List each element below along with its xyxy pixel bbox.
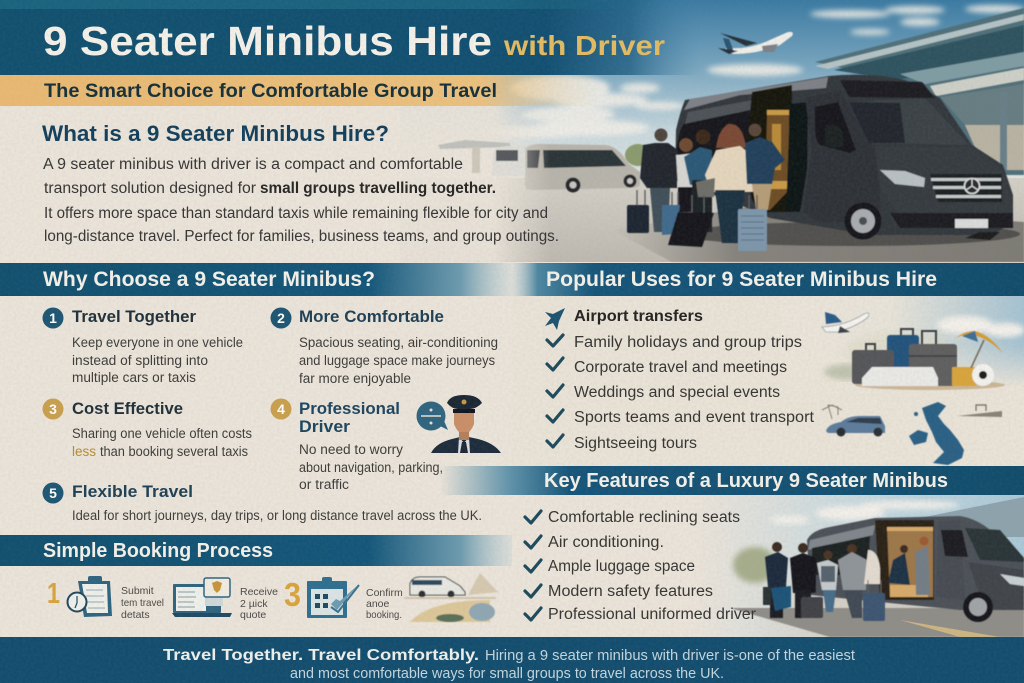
reason 4: professional driver [270,398,443,492]
hero photo: airport scene [400,0,1024,262]
reason 2: more comfortable: and luggage space make journeys [299,353,495,368]
simple booking header band [0,535,512,566]
title accent: with Driver: with Driver [503,30,665,61]
heading: Why Choose a 9 Seater Minibus? [43,268,375,291]
intro bold phrase: small groups travelling together. [260,180,496,197]
group of passengers with luggage [627,124,785,251]
intro line 4: long-distance travel. Perfect for families, business teams, and group outings. [44,228,559,245]
illustration: grey minibus with passengers boarding [763,516,1024,622]
airport terminal [815,8,1024,175]
intro line 2: transport solution designed for [44,180,256,197]
illustration: landmark on hill [957,405,1002,417]
right panel paper sky: popular uses [512,296,1024,466]
booking step 2: receive quote: 2 µick [240,598,268,610]
reason 2: more comfortable: far more enjoyable [299,371,411,386]
use: family holidays: Family holidays and group trips [574,334,802,351]
canopy and distant bus [438,140,524,176]
reason 5: flexible travel: Flexible Travel [72,482,193,501]
airplane [718,32,793,54]
footer bold line: Travel Together. Travel Comfortably. [163,647,479,664]
check [525,511,541,523]
feature: safety: Modern safety features [548,583,713,600]
icon: plane bullet [545,308,565,330]
background silver minibus [525,144,651,192]
booking step 2: receive quote: quote [240,609,266,621]
reason 2: more comfortable: More Comfortable [299,307,444,326]
reason 3: cost effective: than booking several taxis [100,444,248,459]
check [547,410,563,422]
check [547,385,563,397]
check [547,335,563,346]
intro line 3: It offers more space than standard taxis while remaining flexible for city and [44,205,548,222]
heading: Simple Booking Process [43,540,273,562]
reason 3: cost effective: 3 [49,401,57,417]
booking step 1: submit details: 1 [47,578,60,610]
booking step 3: confirm booking: booking. [366,609,402,621]
reason 1: travel together: instead of splitting into [72,353,208,368]
check [525,560,541,572]
reason 5: flexible travel [42,482,482,523]
reason 2: more comfortable: Spacious seating, air-conditioning [299,335,498,350]
heading: Popular Uses for 9 Seater Minibus Hire [546,268,937,291]
subtitle band [0,75,600,106]
key features list [525,509,756,623]
reason 2: more comfortable [270,307,498,386]
check [525,608,541,620]
heading: Key Features of a Luxury 9 Seater Minibus [544,470,948,492]
reason 1: travel together: 1 [49,310,57,326]
subtitle: The Smart Choice for Comfortable Group Travel [44,81,497,102]
key features panel background [512,495,1024,637]
reason 2: more comfortable: 2 [277,310,285,326]
reason 1: travel together: Keep everyone in one vehicle [72,335,243,350]
use: corporate travel: Corporate travel and meetings [574,359,787,376]
booking step 3: confirm booking [284,576,403,621]
main title: 9 Seater Minibus Hire [43,18,492,64]
booking step 1: submit details: detats [121,609,150,621]
reason 4: professional driver: 4 [277,401,285,417]
popular uses list [545,308,815,452]
footer band [0,637,1024,683]
illustration: UK map [909,402,964,465]
reason 4: professional driver: or traffic [299,477,349,492]
illustration: small plane [822,312,869,333]
reason 1: travel together: Travel Together [72,307,196,326]
illustration: luggage and beach items [852,329,1005,390]
booking step 1: submit details: Submit [121,585,154,597]
reason 3: cost effective: less [72,444,96,459]
reason 4: professional driver: Driver [299,417,350,436]
reason 5: flexible travel: Ideal for short journeys, day trips, or long distance travel across the UK. [72,508,482,523]
footer text line 1: Hiring a 9 seater minibus with driver is-one of the easiest [485,647,856,664]
booking illustration: minibus and landscape [404,573,498,622]
use: weddings: Weddings and special events [574,384,780,401]
section heading: What is a 9 Seater Minibus Hire? [42,121,389,146]
use: airport transfers: Airport transfers [574,308,703,325]
feature: driver: Professional uniformed driver [548,606,756,623]
reason 3: cost effective: Cost Effective [72,399,183,418]
feature: luggage: Ample luggage space [548,558,695,575]
feature: seats: Comfortable reclining seats [548,509,740,526]
booking step 1: submit details [47,576,164,621]
booking step 1: submit details: tem travel [121,597,164,609]
booking step 3: confirm booking: 3 [284,576,301,613]
popular uses header band [512,263,1024,296]
reason 3: cost effective [42,398,252,459]
intro line 1: A 9 seater minibus with driver is a compact and comfortable [43,156,463,173]
left fade of hero into paper [400,106,550,263]
section: what is a 9 seater minibus hire [42,121,559,245]
header band [0,0,700,75]
reason 4: professional driver: about navigation, parking, [299,460,443,475]
booking step 2: receive quote: Receive [240,586,278,598]
booking step 3: confirm booking: anoe [366,598,390,610]
booking step 2: receive quote [172,578,278,621]
check [525,536,541,548]
icon: uniformed driver with speech bubble [416,395,501,453]
reason 1: travel together [42,307,243,385]
reason 3: cost effective: Sharing one vehicle often costs [72,426,252,441]
reason 5: flexible travel: 5 [49,485,57,501]
check [525,585,541,597]
key features header band [440,466,1024,495]
reason 4: professional driver: Professional [299,399,400,418]
main dark Mercedes minibus [675,75,1020,246]
why choose header band [0,263,512,296]
use: sports teams: Sports teams and event transport [574,409,815,426]
check [547,358,563,370]
use: sightseeing: Sightseeing tours [574,435,697,452]
check [547,435,563,447]
illustration: car and palm [822,405,885,436]
feature: air conditioning: Air conditioning. [548,534,664,551]
footer text line 2: and most comfortable ways for small groups to travel across the UK. [290,665,724,682]
reason 4: professional driver: No need to worry [299,442,403,457]
reason 1: travel together: multiple cars or taxis [72,370,196,385]
booking step 3: confirm booking: Confirm [366,587,403,599]
